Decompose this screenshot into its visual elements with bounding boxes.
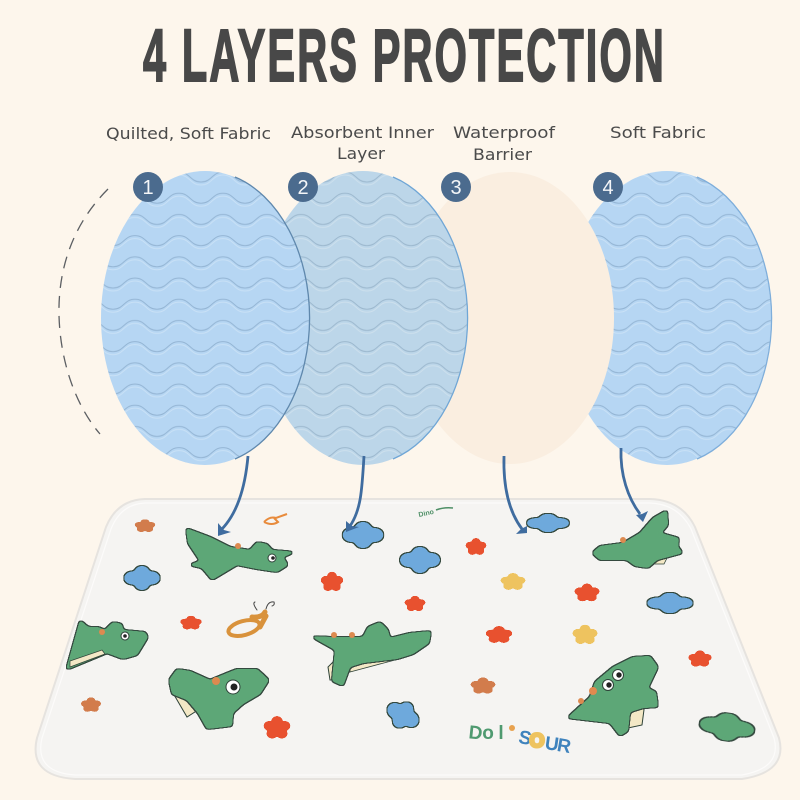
badge 3 [441, 172, 471, 202]
blue clouds [124, 514, 693, 735]
badge 4: 4 [602, 177, 614, 199]
brand lettering: l [498, 723, 504, 744]
brand lettering: R [555, 735, 573, 758]
layer 4 disc [563, 171, 772, 465]
orange squiggle flower [264, 514, 287, 524]
arrow 2 [346, 456, 364, 532]
badge 2: 2 [297, 177, 309, 199]
badge 4 [593, 172, 623, 202]
dinosaur: top right [592, 510, 683, 568]
label: layer 2 [291, 123, 434, 163]
badge 1 [133, 172, 163, 202]
badge 3: 3 [450, 177, 462, 199]
tan flowers [81, 519, 495, 712]
brand lettering: o [482, 723, 494, 744]
arrow 1 [218, 456, 248, 536]
dinosaur: centre [310, 622, 431, 686]
red flowers [180, 538, 712, 738]
layer 3 disc [406, 172, 614, 464]
label: layer 3: Barrier [473, 145, 532, 164]
dinosaur: bottom right [567, 656, 658, 736]
label: layer 1: Quilted, Soft Fabric [106, 124, 271, 143]
dinosaur: bottom left [169, 669, 269, 729]
green stroke mark [436, 508, 453, 510]
dinosaur: top left [186, 528, 296, 580]
title: 4 LAYERS PROTECTION [143, 14, 664, 97]
brand lettering: D [468, 722, 484, 745]
brand lettering: U [544, 733, 560, 756]
changing mat [36, 499, 780, 779]
yellow flowers [501, 573, 597, 644]
badge 2 [288, 172, 318, 202]
small green mark text: Dino [418, 509, 435, 519]
brand lettering: O [530, 731, 544, 752]
label: layer 3 [453, 123, 555, 164]
brand lettering [468, 722, 573, 758]
label: layer 2: Absorbent Inner [291, 123, 434, 142]
giraffe ring toy [227, 602, 274, 639]
dashed rotation arc [59, 189, 108, 434]
brand lettering: S [517, 727, 533, 750]
layer 2 disc [259, 171, 468, 465]
arrow 4 [621, 448, 648, 522]
green cloud [698, 710, 756, 744]
arrow 3 [504, 456, 527, 534]
dinosaur: left edge [66, 620, 148, 670]
label: layer 4: Soft Fabric [610, 123, 706, 142]
label: layer 2: Layer [337, 144, 385, 163]
badge 1: 1 [142, 177, 154, 199]
label: layer 3: Waterproof [453, 123, 555, 142]
layer 1 disc [101, 171, 310, 465]
